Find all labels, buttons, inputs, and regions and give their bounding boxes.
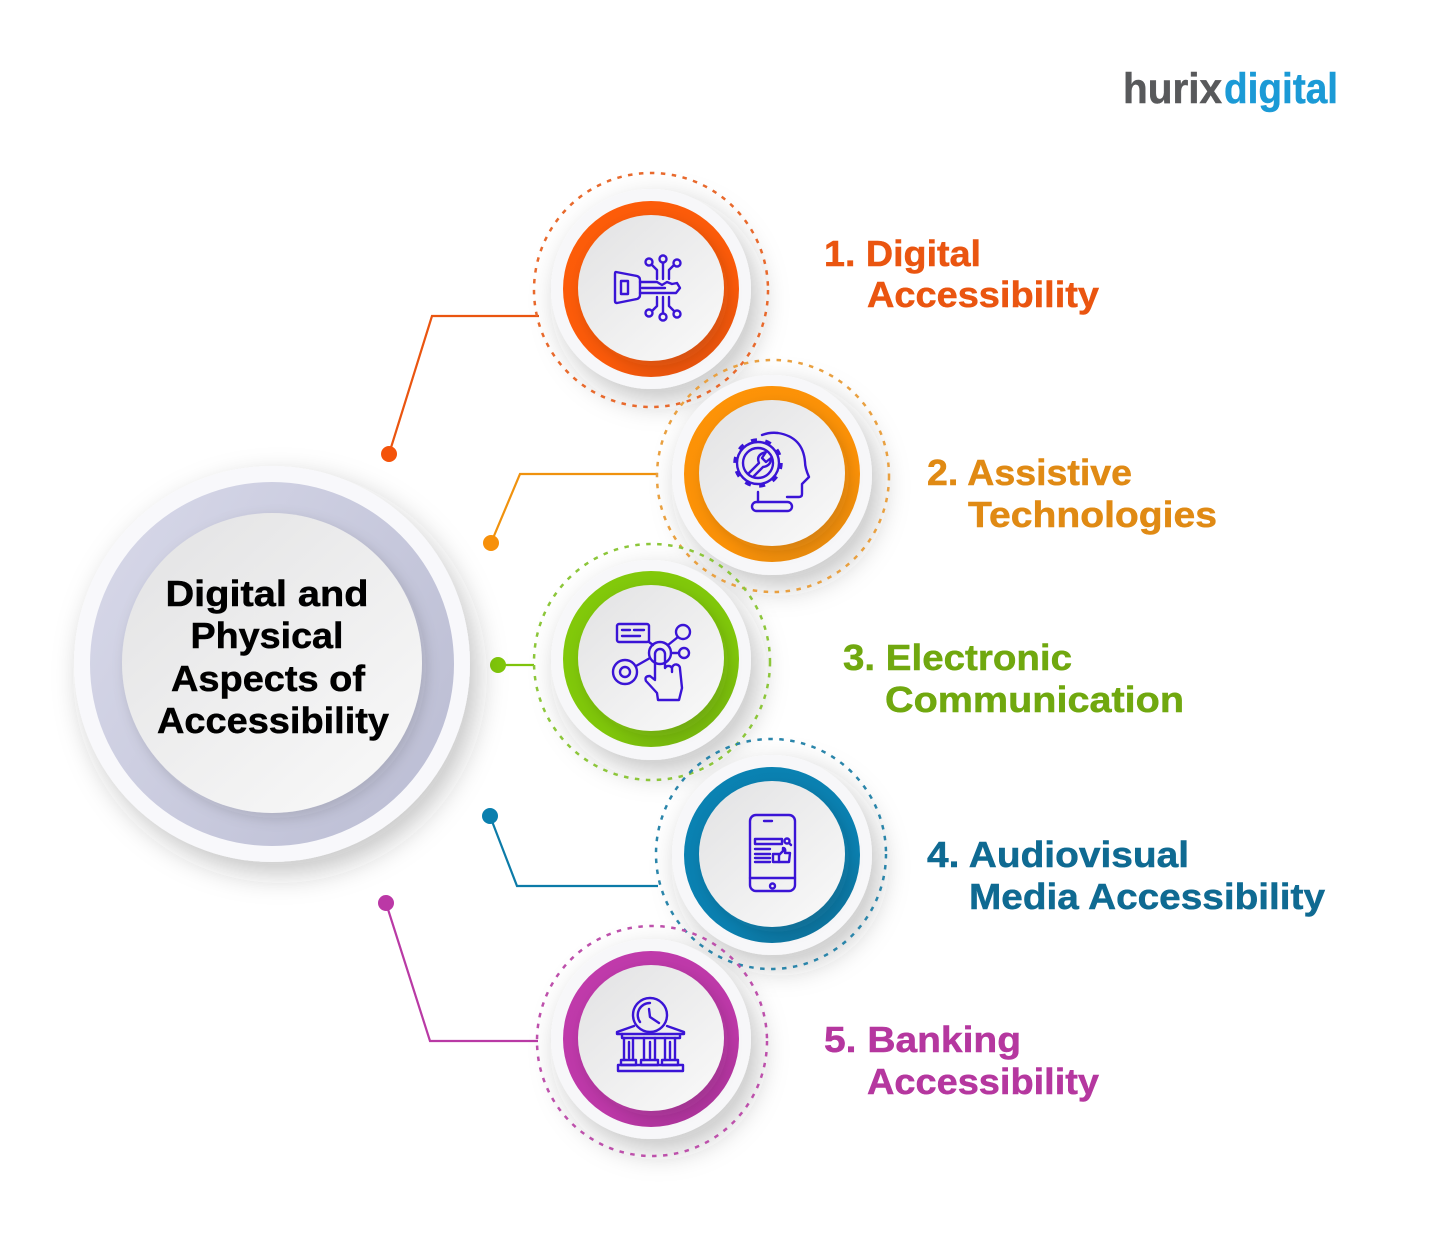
logo: hurix digital bbox=[1123, 65, 1338, 113]
icon: head with gear bbox=[735, 433, 809, 511]
central title: Physical bbox=[190, 615, 344, 656]
node 5 disc bbox=[551, 939, 751, 1139]
label 1: Digital Accessibility: 1. Digital bbox=[824, 233, 981, 274]
label 2: Assistive Technologies bbox=[927, 452, 1217, 535]
central title: Accessibility bbox=[157, 700, 389, 741]
connector 2 bbox=[483, 474, 658, 551]
node 3 disc bbox=[551, 560, 751, 760]
label 1: Digital Accessibility: Accessibility bbox=[867, 274, 1099, 315]
label 5: Banking Accessibility: 5. Banking bbox=[824, 1019, 1021, 1060]
icon: smartphone with like bbox=[750, 815, 795, 891]
label 2: Assistive Technologies: 2. Assistive bbox=[927, 452, 1132, 493]
dashed ring 4 bbox=[656, 739, 886, 969]
icon: bank with clock bbox=[617, 998, 684, 1071]
label 5: Banking Accessibility bbox=[824, 1019, 1099, 1102]
central title: Aspects of bbox=[171, 658, 366, 699]
label 3: Electronic Communication bbox=[843, 637, 1184, 720]
logo: hurix digital: digital bbox=[1224, 65, 1338, 113]
label 4: Audiovisual Media Accessibility: 4. Audiovisual bbox=[927, 834, 1189, 875]
central title bbox=[157, 573, 389, 741]
connector 5 bbox=[378, 895, 538, 1041]
connector 1 bbox=[381, 316, 539, 462]
dashed ring 5 bbox=[537, 926, 767, 1156]
label 1: Digital Accessibility bbox=[824, 233, 1099, 315]
logo: hurix digital: hurix bbox=[1123, 65, 1222, 113]
dashed ring 1 bbox=[534, 173, 768, 407]
connector 4 bbox=[482, 808, 658, 886]
icon: digital key bbox=[615, 256, 680, 320]
node 2 disc bbox=[672, 375, 872, 575]
label 3: Electronic Communication: 3. Electronic bbox=[843, 637, 1072, 678]
dashed ring 2 bbox=[657, 360, 889, 592]
node 4 disc bbox=[672, 755, 872, 955]
node 1 disc bbox=[551, 189, 751, 389]
connector 3 bbox=[490, 657, 534, 673]
label 5: Banking Accessibility: Accessibility bbox=[867, 1061, 1099, 1102]
central title: Digital and bbox=[166, 573, 368, 614]
label 4: Audiovisual Media Accessibility: Media Accessibility bbox=[969, 876, 1325, 917]
icon: touch communication bbox=[613, 624, 690, 700]
label 2: Assistive Technologies: Technologies bbox=[968, 494, 1217, 535]
central circle bbox=[74, 466, 470, 862]
label 3: Electronic Communication: Communication bbox=[885, 679, 1184, 720]
dashed ring 3 bbox=[534, 544, 770, 780]
label 4: Audiovisual Media Accessibility bbox=[927, 834, 1325, 917]
